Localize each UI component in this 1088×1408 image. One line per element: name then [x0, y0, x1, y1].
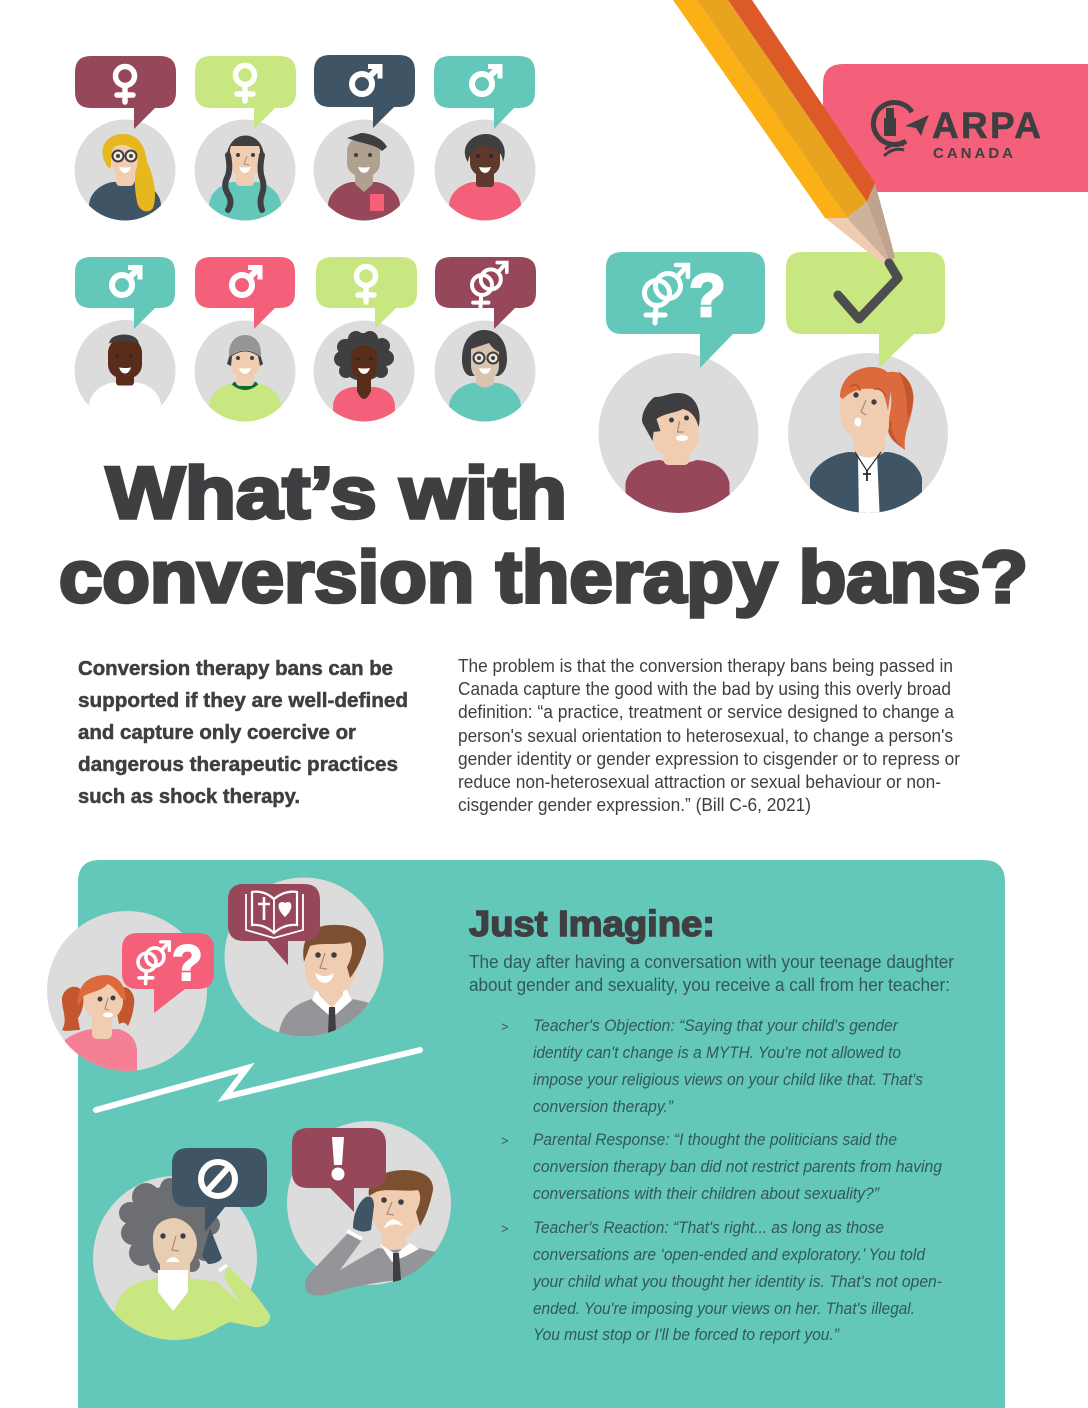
logo wordmark: ARPA	[932, 105, 1041, 146]
icon: open bible	[246, 892, 303, 938]
text block: bold lead statement: and capture only coercive or	[78, 722, 356, 744]
heading: just imagine: Just Imagine:	[469, 903, 715, 944]
text block: bold lead statement: such as shock therapy.	[78, 786, 300, 808]
list item: teacher's reaction: >	[501, 1221, 509, 1236]
list item: teacher's reaction: ended. You're imposing your views on her. That's illegal.	[533, 1300, 915, 1318]
avatar 5: man with white shirt with bubble	[74, 257, 176, 430]
text block: definition paragraph: gender identity or gender expression to cisgender or to repress or	[458, 749, 960, 769]
phone handset	[202, 1228, 222, 1264]
list item: teacher's objection: identity can't change is a MYTH. You're not allowed to	[533, 1044, 901, 1062]
text block: definition paragraph	[458, 656, 960, 815]
list item: teacher's objection	[501, 1017, 923, 1116]
text block: definition paragraph: reduce non-heterosexual attraction or sexual behaviour or non-	[458, 772, 941, 792]
question mark: ?	[172, 935, 203, 991]
text block: definition paragraph: Canada capture the good with the bad by using this overly broad	[458, 679, 951, 699]
list item: teacher's reaction: conversations are ‘open-ended and exploratory.’ You told	[533, 1246, 926, 1264]
list item: teacher's reaction: Teacher's Reaction: “That's right... as long as those	[533, 1219, 884, 1237]
title: What’s with	[106, 453, 567, 534]
avatar 4: dark-skinned person with bubble	[434, 56, 536, 230]
icon: lighthouse logo mark	[873, 102, 929, 156]
list item: parental response	[501, 1131, 943, 1203]
logo subtitle: CANADA	[933, 145, 1013, 162]
avatar 8: woman with bob and glasses with bubble	[434, 257, 536, 431]
text block: scenario intro: The day after having a conversation with your teenage daughter	[469, 952, 954, 972]
avatar 7: woman with afro with bubble	[314, 257, 417, 431]
list item: teacher's reaction: your child what you thought her identity is. That's not open-	[532, 1273, 942, 1291]
text block: definition paragraph: definition: “a practice, treatment or service designed to change a	[458, 702, 955, 722]
list item: parental response: conversations with their children about sexuality?”	[533, 1185, 880, 1203]
icon: pencil drawing check mark	[673, 0, 898, 319]
text block: bold lead statement: supported if they are well-defined	[78, 690, 408, 712]
text block: bold lead statement	[78, 658, 408, 808]
list item: parental response: Parental Response: “I thought the politicians said the	[533, 1131, 897, 1149]
avatar 3: man with flat-top hair with bubble	[314, 55, 415, 230]
angry mother on the phone	[93, 1148, 270, 1345]
questioning man with speech bubble	[598, 252, 765, 523]
phone handset	[353, 1197, 374, 1232]
title	[59, 453, 1028, 618]
worried woman with cross necklace and speech bubble	[786, 252, 948, 523]
avatar 6: man with grey cap with bubble	[194, 257, 296, 431]
list item: teacher's reaction: You must stop or I'll be forced to report you.”	[533, 1326, 840, 1344]
panel: just imagine background	[78, 860, 1005, 1408]
girl with question bubble	[47, 911, 214, 1075]
text block: definition paragraph: The problem is that the conversion therapy bans being passed in	[458, 656, 953, 676]
list item: teacher's reaction	[501, 1219, 942, 1344]
panel: logo tab	[823, 64, 1088, 192]
text block: definition paragraph: person's sexual orientation to heterosexual, to change a person's	[458, 726, 953, 746]
list item: parental response: >	[501, 1133, 509, 1148]
zigzag phone line	[96, 1050, 420, 1110]
text block: bold lead statement: dangerous therapeutic practices	[78, 754, 398, 776]
list item: teacher's objection: impose your religious views on your child like that. That's	[533, 1071, 923, 1089]
alarmed teacher on the phone	[287, 1121, 451, 1296]
title: conversion therapy bans?	[59, 537, 1028, 618]
list item: teacher's objection: >	[501, 1019, 509, 1034]
text block: bold lead statement: Conversion therapy bans can be	[78, 658, 393, 680]
icon: prohibition sign	[201, 1162, 235, 1196]
avatar 1: blonde woman with bubble	[74, 56, 176, 230]
text block: definition paragraph: cisgender gender expression.” (Bill C-6, 2021)	[458, 795, 811, 815]
text block: scenario intro	[469, 952, 954, 995]
avatar 2: woman with braids with bubble	[194, 56, 296, 230]
question mark: ?	[689, 262, 726, 329]
list item: parental response: conversion therapy ban did not restrict parents from having	[533, 1158, 943, 1176]
list item: teacher's objection: Teacher's Objection: “Saying that your child's gender	[533, 1017, 899, 1035]
icon: exclamation mark	[332, 1137, 344, 1180]
list item: teacher's objection: conversion therapy.”	[533, 1098, 674, 1116]
smiling father with bible bubble	[224, 878, 384, 1050]
text block: scenario intro: about gender and sexuality, you receive a call from her teacher:	[469, 975, 950, 995]
